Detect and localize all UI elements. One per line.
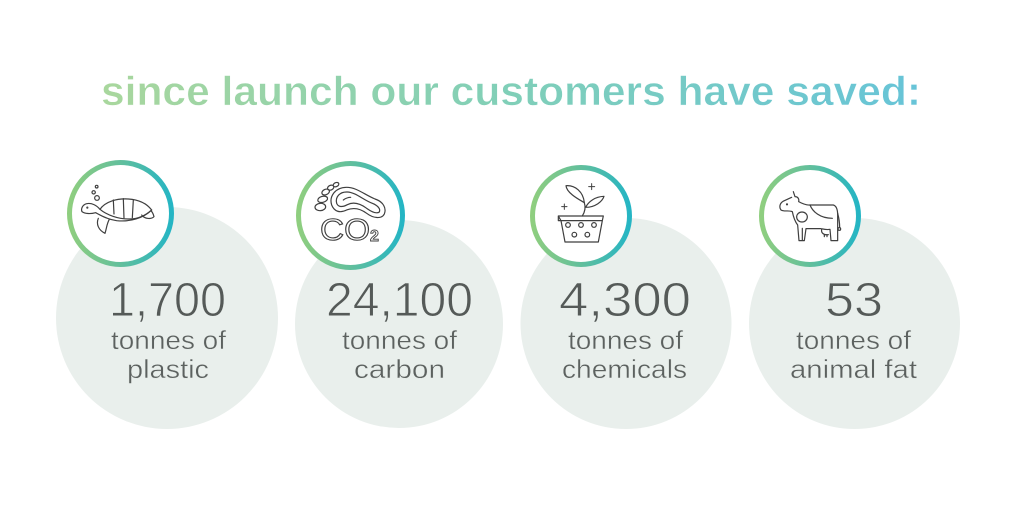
number: 4,300: 4,300 (559, 274, 691, 327)
label: tonnes of animal fat: tonnes of (796, 325, 912, 355)
icon: turtle (70, 162, 172, 264)
label: tonnes of chemicals (562, 325, 687, 384)
label: tonnes of chemicals: tonnes of (568, 325, 684, 355)
label: tonnes of carbon: carbon (354, 354, 445, 384)
panel: carbon (295, 164, 503, 428)
label: tonnes of chemicals: chemicals (562, 354, 687, 384)
label: tonnes of animal fat (790, 325, 918, 384)
number: 53: 53 (825, 274, 883, 327)
background circle: chemicals (520, 218, 732, 429)
label: tonnes of carbon (342, 325, 458, 384)
background circle: carbon (295, 220, 503, 428)
label: tonnes of plastic: tonnes of (111, 325, 227, 355)
background circle: plastic (56, 207, 278, 429)
label: tonnes of animal fat: animal fat (790, 354, 918, 384)
number: 1,700: 1,700 (109, 274, 226, 327)
icon: plant pot (532, 168, 630, 264)
panel: chemicals (520, 168, 732, 429)
icon: CO2 footprint (298, 164, 402, 268)
title: since launch our customers have saved: (101, 68, 921, 114)
icon text: CO2: CO (320, 212, 370, 247)
panel: plastic (56, 162, 278, 429)
icon: CO2 footprint: 2 (370, 228, 379, 245)
label: tonnes of carbon: tonnes of (342, 325, 458, 355)
label: tonnes of plastic (111, 325, 227, 384)
background circle: animal fat (749, 218, 960, 429)
label: tonnes of plastic: plastic (127, 354, 209, 384)
icon: cow (762, 168, 858, 264)
panel: animal fat (749, 168, 960, 429)
number: 24,100: 24,100 (326, 274, 473, 327)
